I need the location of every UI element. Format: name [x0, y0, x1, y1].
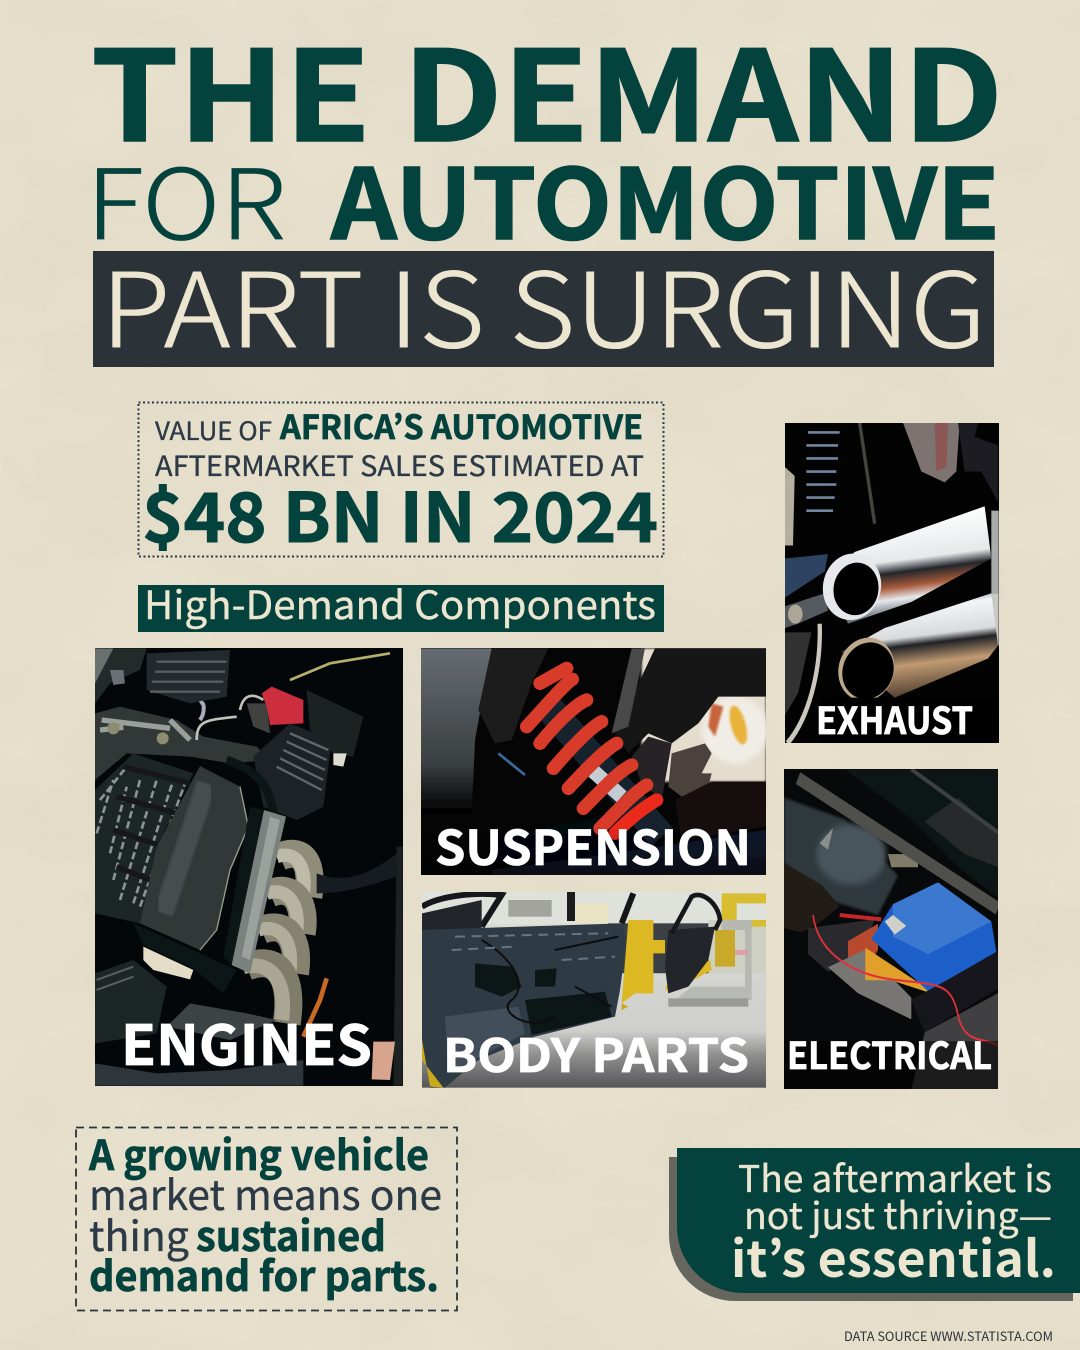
line 1: A growing vehicle [88, 1122, 429, 1182]
panel: exhaust photo [785, 423, 999, 745]
title [86, 0, 1003, 377]
label: BODY PARTS: BODY PARTS [443, 1020, 749, 1086]
label: aftermarket sales: AFTERMARKET SALES ESTIMATED AT [155, 445, 644, 485]
callout shadow [669, 1157, 1073, 1301]
callout: sustained demand [76, 1122, 457, 1310]
title word: FOR: FOR [86, 126, 286, 267]
title word: AUTOMOTIVE: AUTOMOTIVE [330, 126, 1000, 267]
label: SUSPENSION: SUSPENSION [435, 809, 751, 879]
stat: $48 BN in 2024: $48 BN IN 2024 [142, 463, 658, 562]
line 1: The aftermarket is [738, 1149, 1052, 1203]
label: Africa's automotive: AFRICA’S AUTOMOTIVE [279, 401, 643, 449]
line 4: demand for parts. [89, 1243, 439, 1303]
line 3 end: sustained [196, 1203, 386, 1263]
title band [93, 251, 994, 367]
panel: market value callout [138, 401, 664, 562]
dashed frame [76, 1128, 457, 1310]
line 2: market means one [89, 1162, 442, 1222]
callout panel [677, 1148, 1080, 1293]
line 2: not just thriving— [744, 1186, 1052, 1240]
label: ELECTRICAL: ELECTRICAL [787, 1026, 992, 1080]
data source: DATA SOURCE WWW.STATISTA.COM [844, 1326, 1053, 1345]
panel: electrical photo [784, 769, 998, 1090]
label: ENGINES: ENGINES [121, 1001, 372, 1081]
heading: high-demand components: High-Demand Components [144, 575, 656, 631]
panel: suspension photo [421, 648, 768, 879]
line 3 start: thing [89, 1203, 189, 1263]
dotted frame [138, 402, 664, 556]
title line: THE DEMAND: THE DEMAND [91, 0, 1003, 177]
panel: body parts photo [421, 891, 768, 1088]
panel: engines photo [95, 648, 403, 1086]
line 3: it’s essential. [731, 1220, 1056, 1292]
label: EXHAUST: EXHAUST [816, 691, 973, 745]
callout: aftermarket essential [669, 1148, 1080, 1301]
label: value of: VALUE OF [155, 412, 272, 448]
title line: PART IS SURGING: PART IS SURGING [101, 228, 986, 377]
